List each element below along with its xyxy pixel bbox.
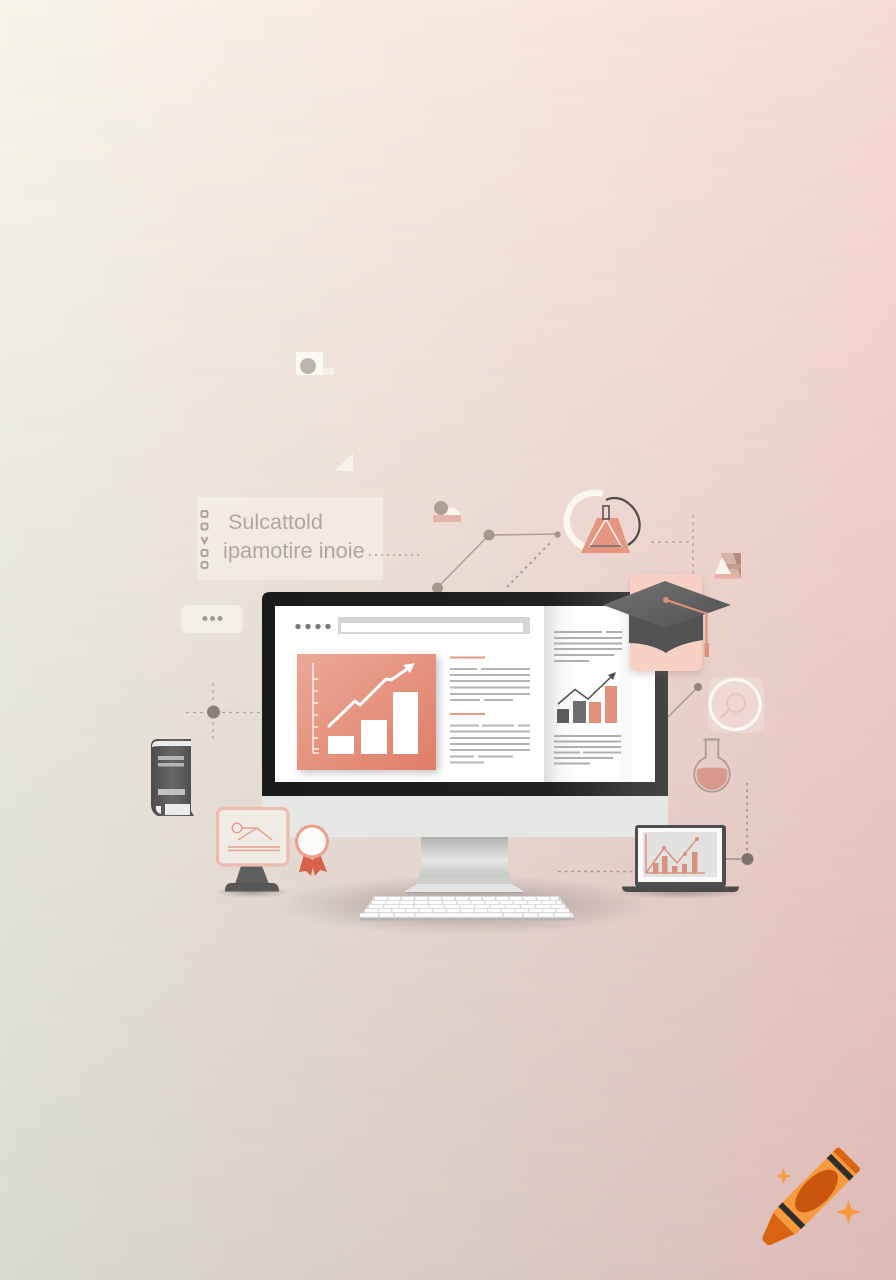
monitor stand (405, 837, 524, 894)
article text column (450, 658, 530, 762)
checklist icons (202, 511, 208, 568)
monitor screen (275, 606, 655, 782)
decorative white square with circle (296, 352, 334, 375)
chart axis (313, 663, 319, 753)
small bar chart (557, 672, 617, 723)
right page text lines (554, 632, 622, 764)
crosshair node (186, 683, 262, 742)
panel heading: Sulcattold (228, 509, 323, 534)
tassel (663, 597, 709, 657)
crayon logo (754, 1146, 861, 1254)
icon: book (151, 739, 194, 816)
icon: flask with ring (567, 493, 640, 553)
keyboard (359, 896, 575, 920)
text panel with checklist (197, 497, 383, 580)
small monitor icon (214, 808, 290, 898)
sparkle small (776, 1168, 792, 1184)
cap board (603, 581, 731, 628)
dots chip (181, 605, 243, 633)
icon: award ribbon (295, 824, 329, 876)
cap base (629, 610, 703, 653)
panel subtitle: ipamotire inoie (223, 538, 365, 563)
browser dots (295, 624, 331, 629)
laptop connector (558, 783, 754, 872)
small triangle icon (715, 553, 741, 578)
chart bars (328, 692, 418, 754)
crayon (754, 1146, 861, 1254)
dotted connector from text panel (369, 554, 420, 556)
network connector nodes (432, 530, 561, 594)
chart trend arrow (329, 663, 415, 726)
small hill icon (433, 501, 461, 522)
main chart card (297, 654, 436, 770)
laptop chart (646, 834, 705, 873)
pink card (630, 574, 702, 671)
monitor bezel (262, 592, 668, 796)
monitor chin (262, 796, 668, 837)
graduation cap on pink card (603, 574, 731, 671)
dashed guides (651, 515, 693, 575)
icon: round flask (694, 740, 730, 792)
sparkle large (836, 1200, 861, 1224)
connector to magnifier (668, 683, 702, 717)
small monitor chart (228, 823, 280, 850)
laptop (615, 825, 747, 899)
shadow under monitor (275, 875, 655, 935)
search bar (338, 617, 530, 634)
icon: magnifier in ring (708, 677, 764, 733)
decorative triangle (334, 453, 353, 471)
monitor (262, 592, 668, 894)
right page (544, 606, 632, 782)
